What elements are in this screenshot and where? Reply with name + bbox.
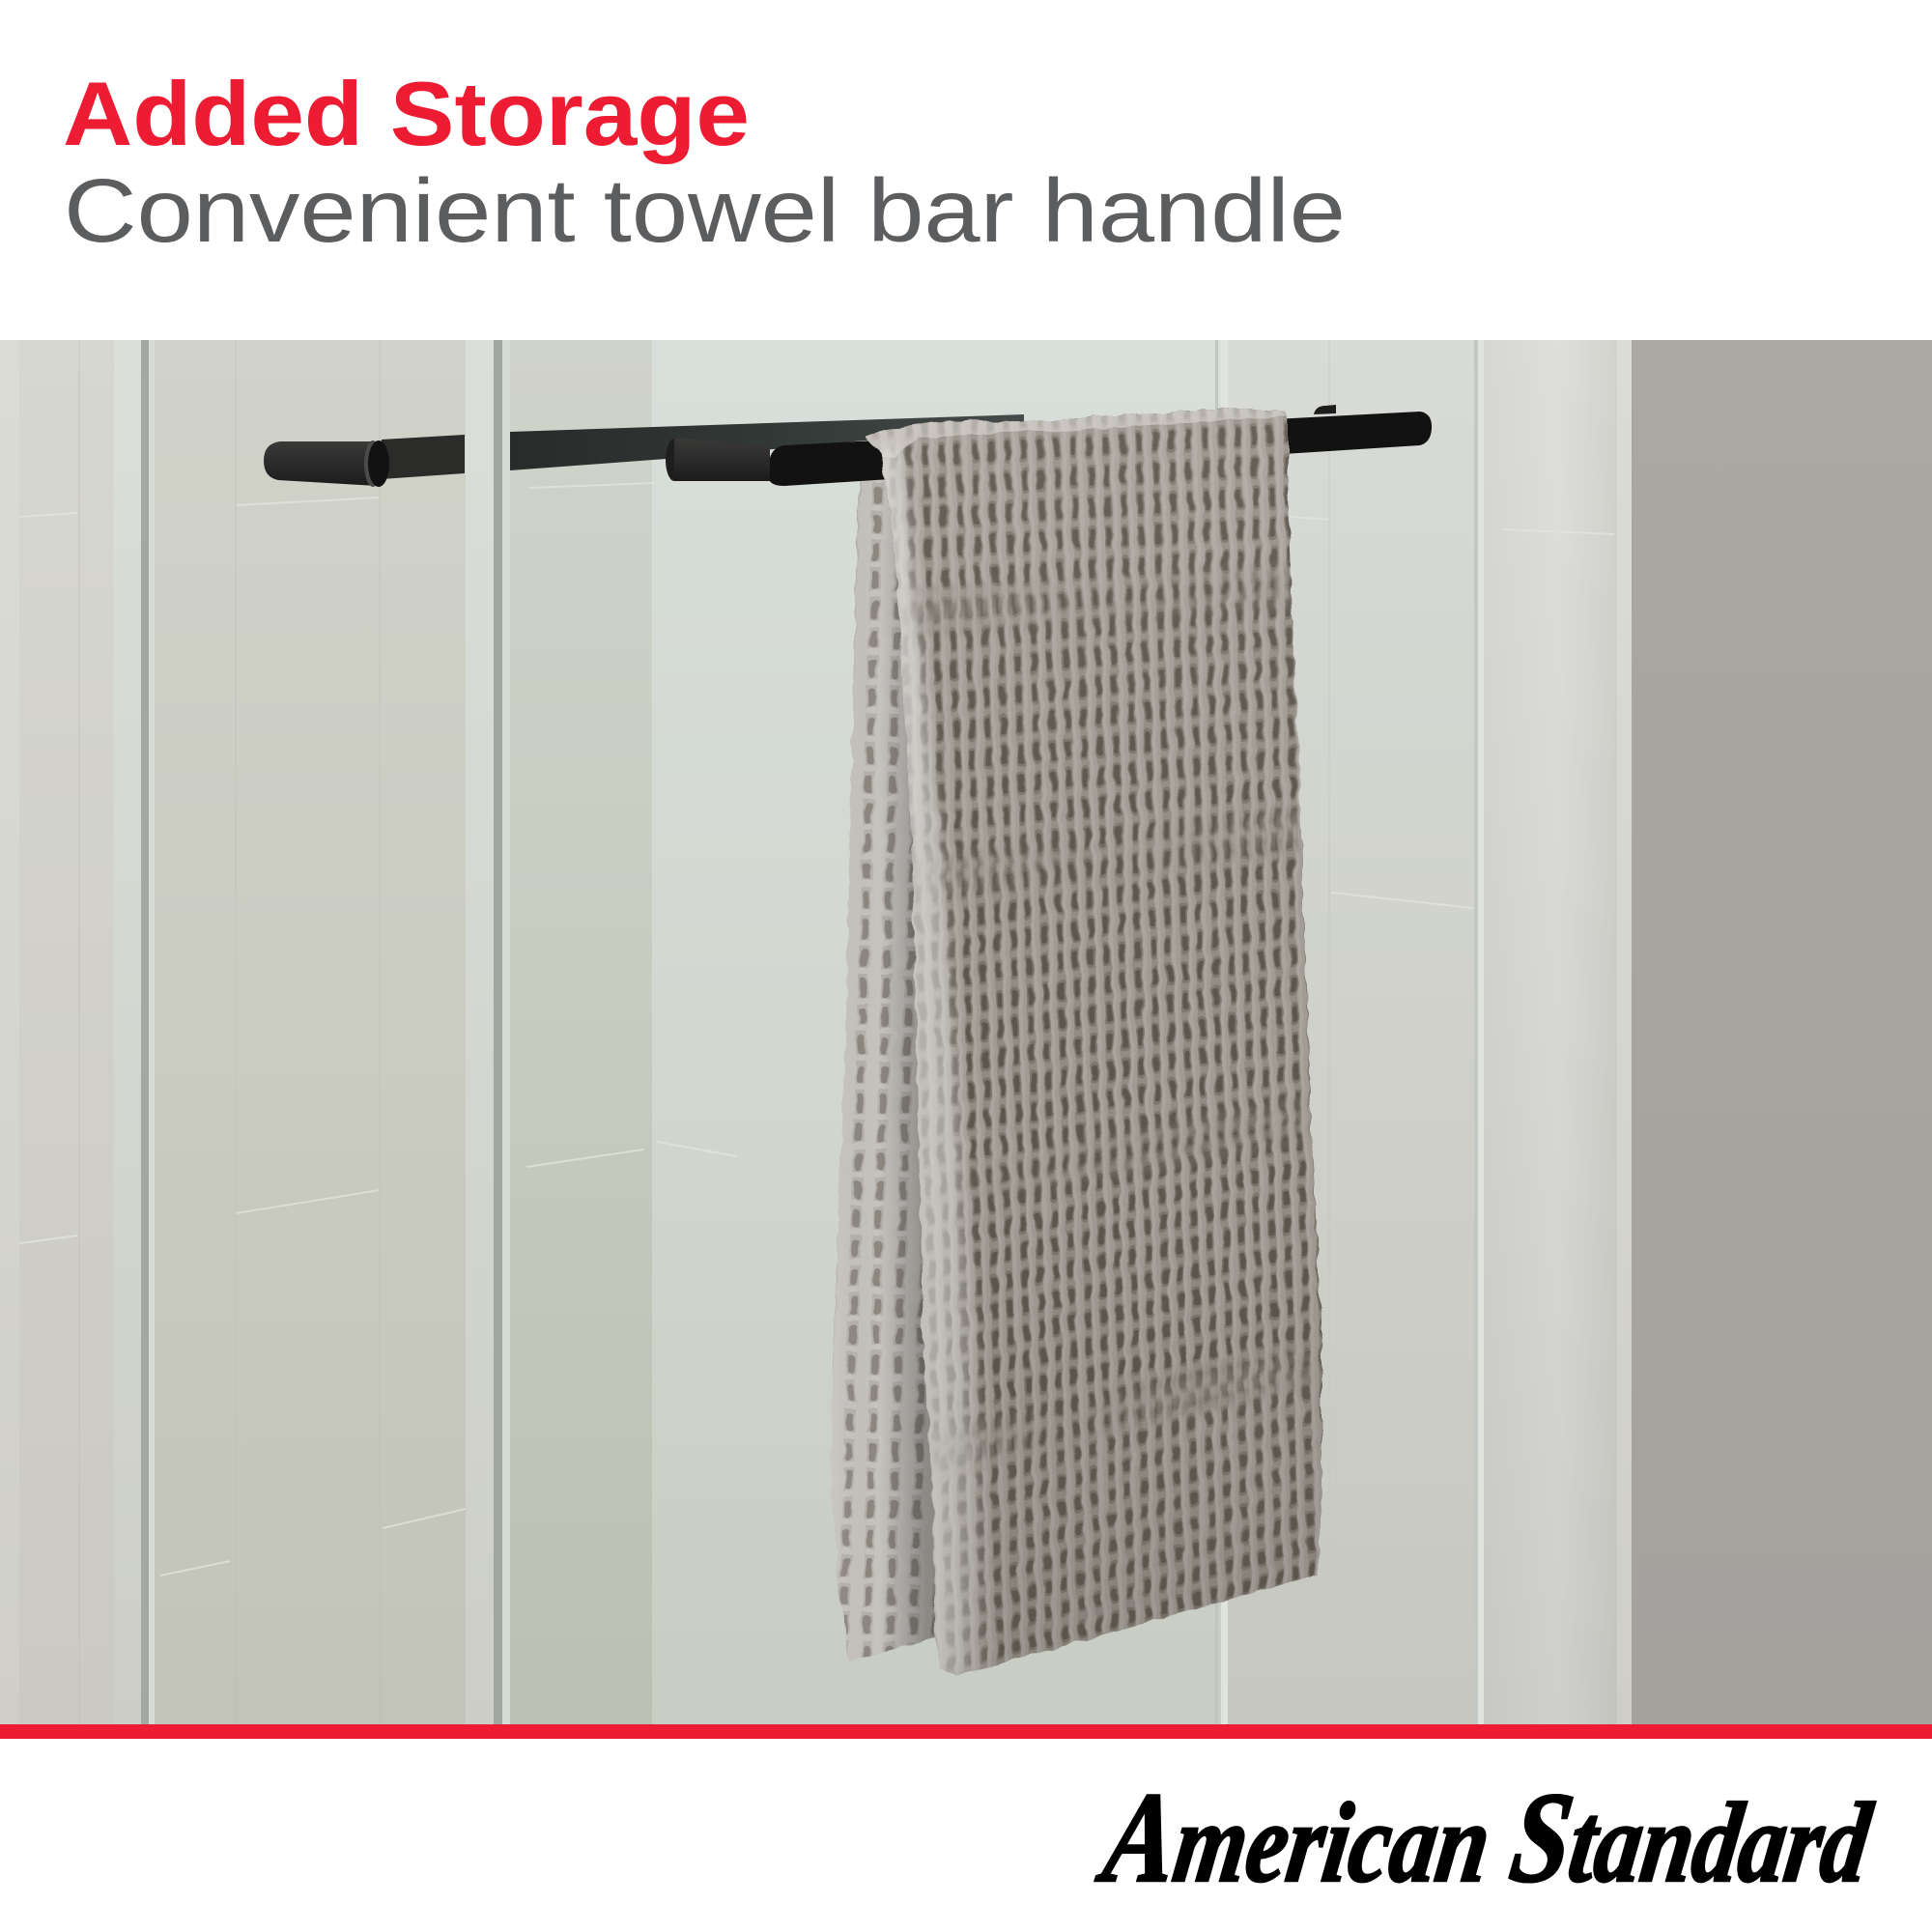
- towel front panel: [866, 408, 1323, 1675]
- towel bar: rear rail seen through glass: [382, 414, 1024, 479]
- towel back panel: [830, 479, 935, 1662]
- title: Added Storage: Added Storage: [63, 63, 750, 164]
- logo: American Standard: American Standard: [1091, 1767, 1881, 1910]
- towel bar: front knob: [666, 439, 770, 481]
- towel bar: small rear knob at right end: [1314, 405, 1336, 414]
- photo: shower wall background: [0, 340, 1932, 1724]
- towel bar: left knob: [264, 440, 389, 487]
- subtitle: Convenient towel bar handle: Convenient towel bar handle: [64, 160, 1346, 261]
- towel bar: front rail: [770, 412, 1432, 486]
- red divider bar: [0, 1724, 1932, 1739]
